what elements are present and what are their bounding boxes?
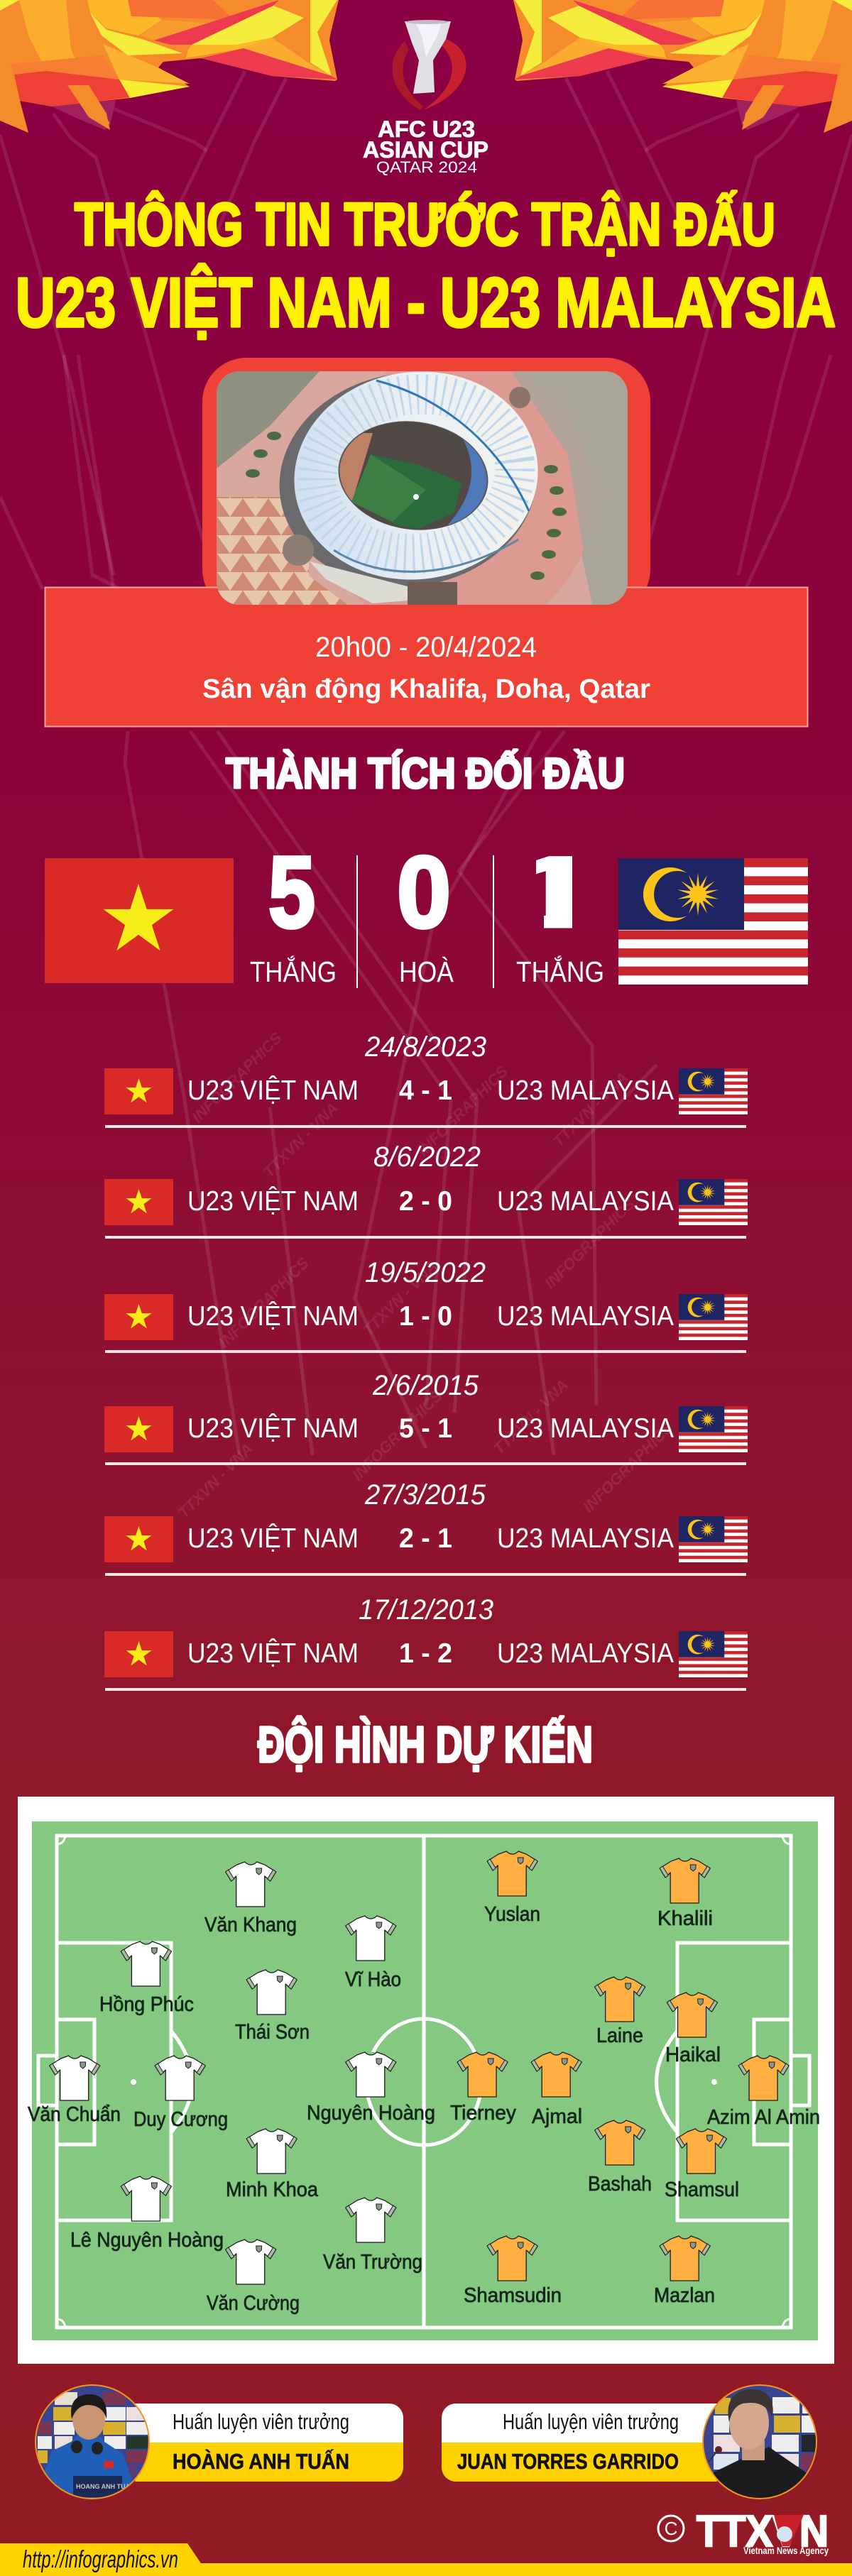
watermark text: INFOGRAPHICS <box>541 1195 638 1293</box>
match row: 19/5/2022: 1 - 0 <box>399 1301 452 1332</box>
match row: 2/6/2015: 5 - 1 <box>399 1413 452 1444</box>
player: Bashah: Bashah <box>588 2173 652 2196</box>
match row: 24/8/2023: 24/8/2023 <box>364 1031 486 1063</box>
copyright symbol <box>658 2516 684 2541</box>
stadium photo <box>217 371 628 605</box>
player: Laine: Laine <box>596 2024 643 2047</box>
player: Azim Al Amin <box>707 2056 820 2129</box>
panel: Vietnam coach <box>32 2382 403 2506</box>
match row: 17/12/2013 <box>104 1594 748 1691</box>
match row: 27/3/2015: U23 MALAYSIA <box>497 1523 674 1554</box>
player: Bashah <box>588 2120 652 2196</box>
panel: venue <box>45 333 808 727</box>
player: Duy Cương: Duy Cương <box>133 2108 228 2131</box>
player: Shamsudin <box>464 2236 562 2307</box>
player: Nguyên Hoàng: Nguyên Hoàng <box>307 2102 435 2125</box>
player: Yuslan: Yuslan <box>484 1903 540 1926</box>
decoration: right flower <box>513 0 852 133</box>
watermark text: TTXVN - VNA <box>359 1257 441 1339</box>
match row: 17/12/2013: U23 MALAYSIA <box>497 1638 674 1669</box>
coach photo: Hoàng Anh Tuấn <box>35 2384 150 2499</box>
match row: 8/6/2022 <box>104 1141 748 1239</box>
divider <box>493 855 494 988</box>
player: Haikal: Haikal <box>665 2044 721 2066</box>
Malaysia wins <box>517 856 602 982</box>
match row: 19/5/2022: U23 VIỆT NAM <box>187 1301 359 1332</box>
match row: 27/3/2015: U23 VIỆT NAM <box>187 1523 359 1554</box>
panel: Malaysia coach <box>442 2382 820 2506</box>
icon: trophy <box>393 20 466 110</box>
player: Lê Nguyên Hoàng: Lê Nguyên Hoàng <box>70 2229 224 2252</box>
player: Mazlan <box>654 2236 715 2307</box>
footer band: http://infographics.vn <box>23 2546 178 2573</box>
logo wordmark <box>363 116 488 176</box>
Vietnam wins <box>250 836 337 988</box>
player: Shamsul <box>665 2129 739 2201</box>
player: Yuslan <box>484 1851 540 1926</box>
footer band <box>0 2543 852 2576</box>
player: Minh Khoa: Minh Khoa <box>226 2178 319 2201</box>
match row: 24/8/2023: 4 - 1 <box>399 1075 452 1106</box>
TTXVN logo: TTXVN <box>697 2507 829 2556</box>
player: Duy Cương <box>133 2056 228 2131</box>
panel: lineup pitch <box>18 1797 834 2364</box>
match row: 17/12/2013: U23 VIỆT NAM <box>187 1638 359 1669</box>
stadium name: Sân vận động Khalifa, Doha, Qatar <box>202 674 650 704</box>
player: Minh Khoa <box>226 2129 319 2201</box>
player: Azim Al Amin: Azim Al Amin <box>707 2106 820 2129</box>
watermark text: TTXVN - VNA <box>490 1376 572 1458</box>
player: Thái Sơn: Thái Sơn <box>235 2021 310 2044</box>
player: Văn Trường: Văn Trường <box>323 2251 422 2274</box>
player: Văn Khang <box>204 1862 297 1936</box>
player: Văn Chuẩn: Văn Chuẩn <box>28 2103 121 2126</box>
date and time: 20h00 - 20/4/2024 <box>315 632 537 663</box>
heading: expected lineup: ĐỘI HÌNH DỰ KIẾN <box>258 1716 593 1773</box>
match row: 27/3/2015 <box>104 1479 748 1576</box>
player: Hồng Phúc: Hồng Phúc <box>99 1993 194 2016</box>
match row: 27/3/2015: 27/3/2015 <box>364 1479 486 1511</box>
white card <box>18 1797 834 2364</box>
player: Shamsudin: Shamsudin <box>464 2284 562 2307</box>
Vietnam wins: THẮNG <box>250 955 337 988</box>
match row: 19/5/2022 <box>104 1257 748 1353</box>
watermark text <box>175 1029 677 1522</box>
player: Thái Sơn <box>235 1970 310 2044</box>
player: Tierney <box>450 2052 516 2125</box>
match row: 2/6/2015: 2/6/2015 <box>372 1370 479 1401</box>
match row: 2/6/2015: U23 VIỆT NAM <box>187 1413 359 1444</box>
draws: 0 <box>397 836 451 949</box>
player: Lê Nguyên Hoàng <box>70 2176 224 2252</box>
player: Văn Chuẩn <box>28 2056 121 2126</box>
player: Vĩ Hào <box>345 1916 401 1991</box>
pitch <box>32 1821 818 2340</box>
player: Ajmal <box>531 2052 582 2128</box>
match row: 8/6/2022: 2 - 0 <box>399 1186 452 1217</box>
name plate <box>442 2404 717 2482</box>
Malaysia wins: THẮNG <box>516 955 604 988</box>
match row: 24/8/2023 <box>104 1031 748 1128</box>
name plate: Huấn luyện viên trưởng <box>173 2409 349 2434</box>
player: Văn Trường <box>323 2198 422 2274</box>
logo wordmark: AFC U23 <box>378 116 475 142</box>
venue info box <box>45 588 808 727</box>
watermark text: TTXVN - VNA <box>260 1099 342 1181</box>
icon: Vietnam flag <box>45 858 234 983</box>
TTXVN logo: Vietnam News Agency <box>743 2545 829 2556</box>
heading: head to head record: THÀNH TÍCH ĐỐI ĐẦU <box>226 750 625 797</box>
coach photo: Juan Torres Garrido <box>702 2384 817 2499</box>
icon: Malaysia flag <box>618 858 808 985</box>
player: Khalili: Khalili <box>657 1907 713 1930</box>
name plate: JUAN TORRES GARRIDO <box>457 2449 679 2474</box>
player: Vĩ Hào: Vĩ Hào <box>345 1968 401 1991</box>
player: Nguyên Hoàng <box>307 2052 435 2125</box>
name plate: Huấn luyện viên trưởng <box>503 2409 679 2434</box>
title <box>16 191 836 341</box>
match row: 19/5/2022: 19/5/2022 <box>365 1257 486 1288</box>
AFC U23 Asian Cup logo <box>363 20 488 176</box>
match row: 19/5/2022: U23 MALAYSIA <box>497 1301 674 1332</box>
watermark text: TTXVN - VNA <box>550 1068 631 1151</box>
match row: 2/6/2015: U23 MALAYSIA <box>497 1413 674 1444</box>
player: Hồng Phúc <box>99 1941 194 2016</box>
player: Tierney: Tierney <box>450 2102 516 2125</box>
watermark text: TTXVN - VNA <box>175 1440 256 1522</box>
player: Laine <box>595 1977 645 2047</box>
match row: 8/6/2022: 8/6/2022 <box>373 1141 481 1173</box>
Malaysia wins: 1 <box>501 835 613 948</box>
coach photo: Hoàng Anh Tuấn: HOANG ANH TUAN <box>76 2483 135 2490</box>
match row: 17/12/2013: 17/12/2013 <box>359 1594 493 1626</box>
match row: 2/6/2015 <box>104 1370 748 1465</box>
panel: overall record <box>45 855 808 988</box>
match row: 17/12/2013: 1 - 2 <box>399 1638 452 1669</box>
copyright symbol: C <box>665 2518 677 2539</box>
name plate: HOÀNG ANH TUẤN <box>173 2449 349 2474</box>
logo wordmark: QATAR 2024 <box>376 158 477 176</box>
match row: 8/6/2022: U23 VIỆT NAM <box>187 1186 359 1217</box>
player: Khalili <box>657 1858 713 1930</box>
player: Văn Khang: Văn Khang <box>204 1914 297 1936</box>
decoration: left flower <box>0 0 339 133</box>
photo frame <box>202 358 650 613</box>
match row: 8/6/2022: U23 MALAYSIA <box>497 1186 674 1217</box>
match row: 27/3/2015: 2 - 1 <box>399 1523 452 1554</box>
logo wordmark: ASIAN CUP <box>363 137 488 163</box>
player: Ajmal: Ajmal <box>532 2105 582 2128</box>
watermark text: INFOGRAPHICS <box>579 1418 677 1516</box>
match row: 24/8/2023: U23 MALAYSIA <box>497 1075 674 1106</box>
draws: HOÀ <box>399 955 454 988</box>
watermark text: INFOGRAPHICS <box>414 1062 511 1160</box>
watermark text: INFOGRAPHICS <box>188 1029 285 1127</box>
watermark text: INFOGRAPHICS <box>349 1386 446 1484</box>
watermark text: INFOGRAPHICS <box>215 1254 312 1352</box>
player: Mazlan: Mazlan <box>654 2284 715 2307</box>
name plate <box>135 2404 403 2482</box>
Vietnam wins: 5 <box>268 836 315 949</box>
player: Văn Cường <box>207 2240 300 2315</box>
player: Haikal <box>665 1993 721 2066</box>
match row: 24/8/2023: U23 VIỆT NAM <box>187 1075 359 1106</box>
divider <box>356 855 358 988</box>
player: Shamsul: Shamsul <box>665 2178 739 2201</box>
player: Văn Cường: Văn Cường <box>207 2292 300 2315</box>
